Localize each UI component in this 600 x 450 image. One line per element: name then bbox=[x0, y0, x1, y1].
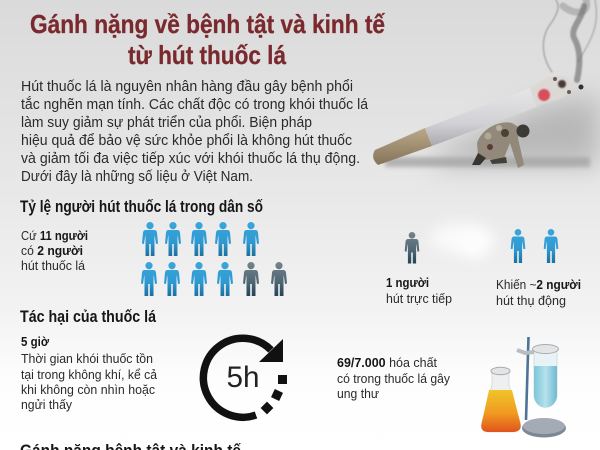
intro paragraph: Hút thuốc lá là nguyên nhân hàng đầu gây bệnh phổi bbox=[21, 78, 353, 95]
title: từ hút thuốc lá bbox=[128, 40, 286, 70]
smoke bbox=[543, 0, 596, 80]
pictogram: direct smoker, smoke, passive smokers bbox=[405, 223, 558, 264]
text: 5 hours: tại trong không khí, kể cả bbox=[21, 367, 158, 382]
pictogram: 11 people bbox=[141, 222, 287, 296]
text: 69 of 7000 chemicals: 69/7.000 hóa chất bbox=[337, 355, 437, 370]
text: 11 people ratio: có 2 người bbox=[21, 243, 83, 258]
text: 69 of 7000 chemicals: ung thư bbox=[337, 386, 379, 401]
cigarette filter bbox=[373, 128, 432, 165]
text: 5 hours: Thời gian khói thuốc tồn bbox=[21, 351, 153, 366]
icon: 5h clock: 5h bbox=[226, 361, 260, 394]
icon: lab flask and test tube bbox=[481, 337, 566, 438]
text: direct smoker bbox=[386, 275, 452, 306]
cigarette paper bbox=[425, 88, 537, 146]
intro paragraph: làm suy giảm sự phát triển của phổi. Biện pháp bbox=[21, 114, 312, 131]
text: passive smokers: hút thụ động bbox=[496, 293, 566, 308]
text: 11 people ratio: Cứ 11 người bbox=[21, 228, 88, 243]
text: direct smoker: 1 người bbox=[386, 275, 429, 290]
text: passive smokers bbox=[496, 277, 581, 308]
title bbox=[30, 9, 385, 70]
text: direct smoker: hút trực tiếp bbox=[386, 291, 452, 306]
text: 5 hours bbox=[21, 334, 158, 412]
image: cigarette crushing a man bbox=[373, 0, 600, 168]
title: Gánh nặng về bệnh tật và kinh tế bbox=[30, 9, 385, 39]
text: 11 people ratio: hút thuốc lá bbox=[21, 258, 86, 273]
ember bbox=[530, 76, 584, 107]
text: 11 people ratio bbox=[21, 228, 88, 273]
intro paragraph: hiệu quả để bảo vệ sức khỏe phổi là không hút thuốc bbox=[21, 132, 352, 149]
intro paragraph bbox=[21, 78, 369, 185]
text: 69 of 7000 chemicals: có trong thuốc lá gây bbox=[337, 371, 450, 386]
text: passive smokers: Khiến ~2 người bbox=[496, 277, 581, 292]
heading: harms: Tác hại của thuốc lá bbox=[20, 308, 157, 326]
icon: 5h clock bbox=[203, 338, 287, 417]
heading: smoking rate: Tỷ lệ người hút thuốc lá trong dân số bbox=[20, 198, 263, 216]
text: 5 hours: 5 giờ bbox=[21, 334, 50, 349]
text: 5 hours: khi không còn nhìn hoặc bbox=[21, 382, 155, 397]
crouching man bbox=[472, 122, 530, 168]
intro paragraph: và giảm tối đa việc tiếp xúc với khói thuốc lá thụ động. bbox=[21, 150, 360, 167]
text: 5 hours: ngửi thấy bbox=[21, 397, 72, 412]
text: 69 of 7000 chemicals bbox=[337, 355, 450, 401]
intro paragraph: tắc nghẽn mạn tính. Các chất độc có trong khói thuốc lá bbox=[21, 96, 369, 113]
intro paragraph: Dưới đây là những số liệu ở Việt Nam. bbox=[21, 168, 253, 185]
